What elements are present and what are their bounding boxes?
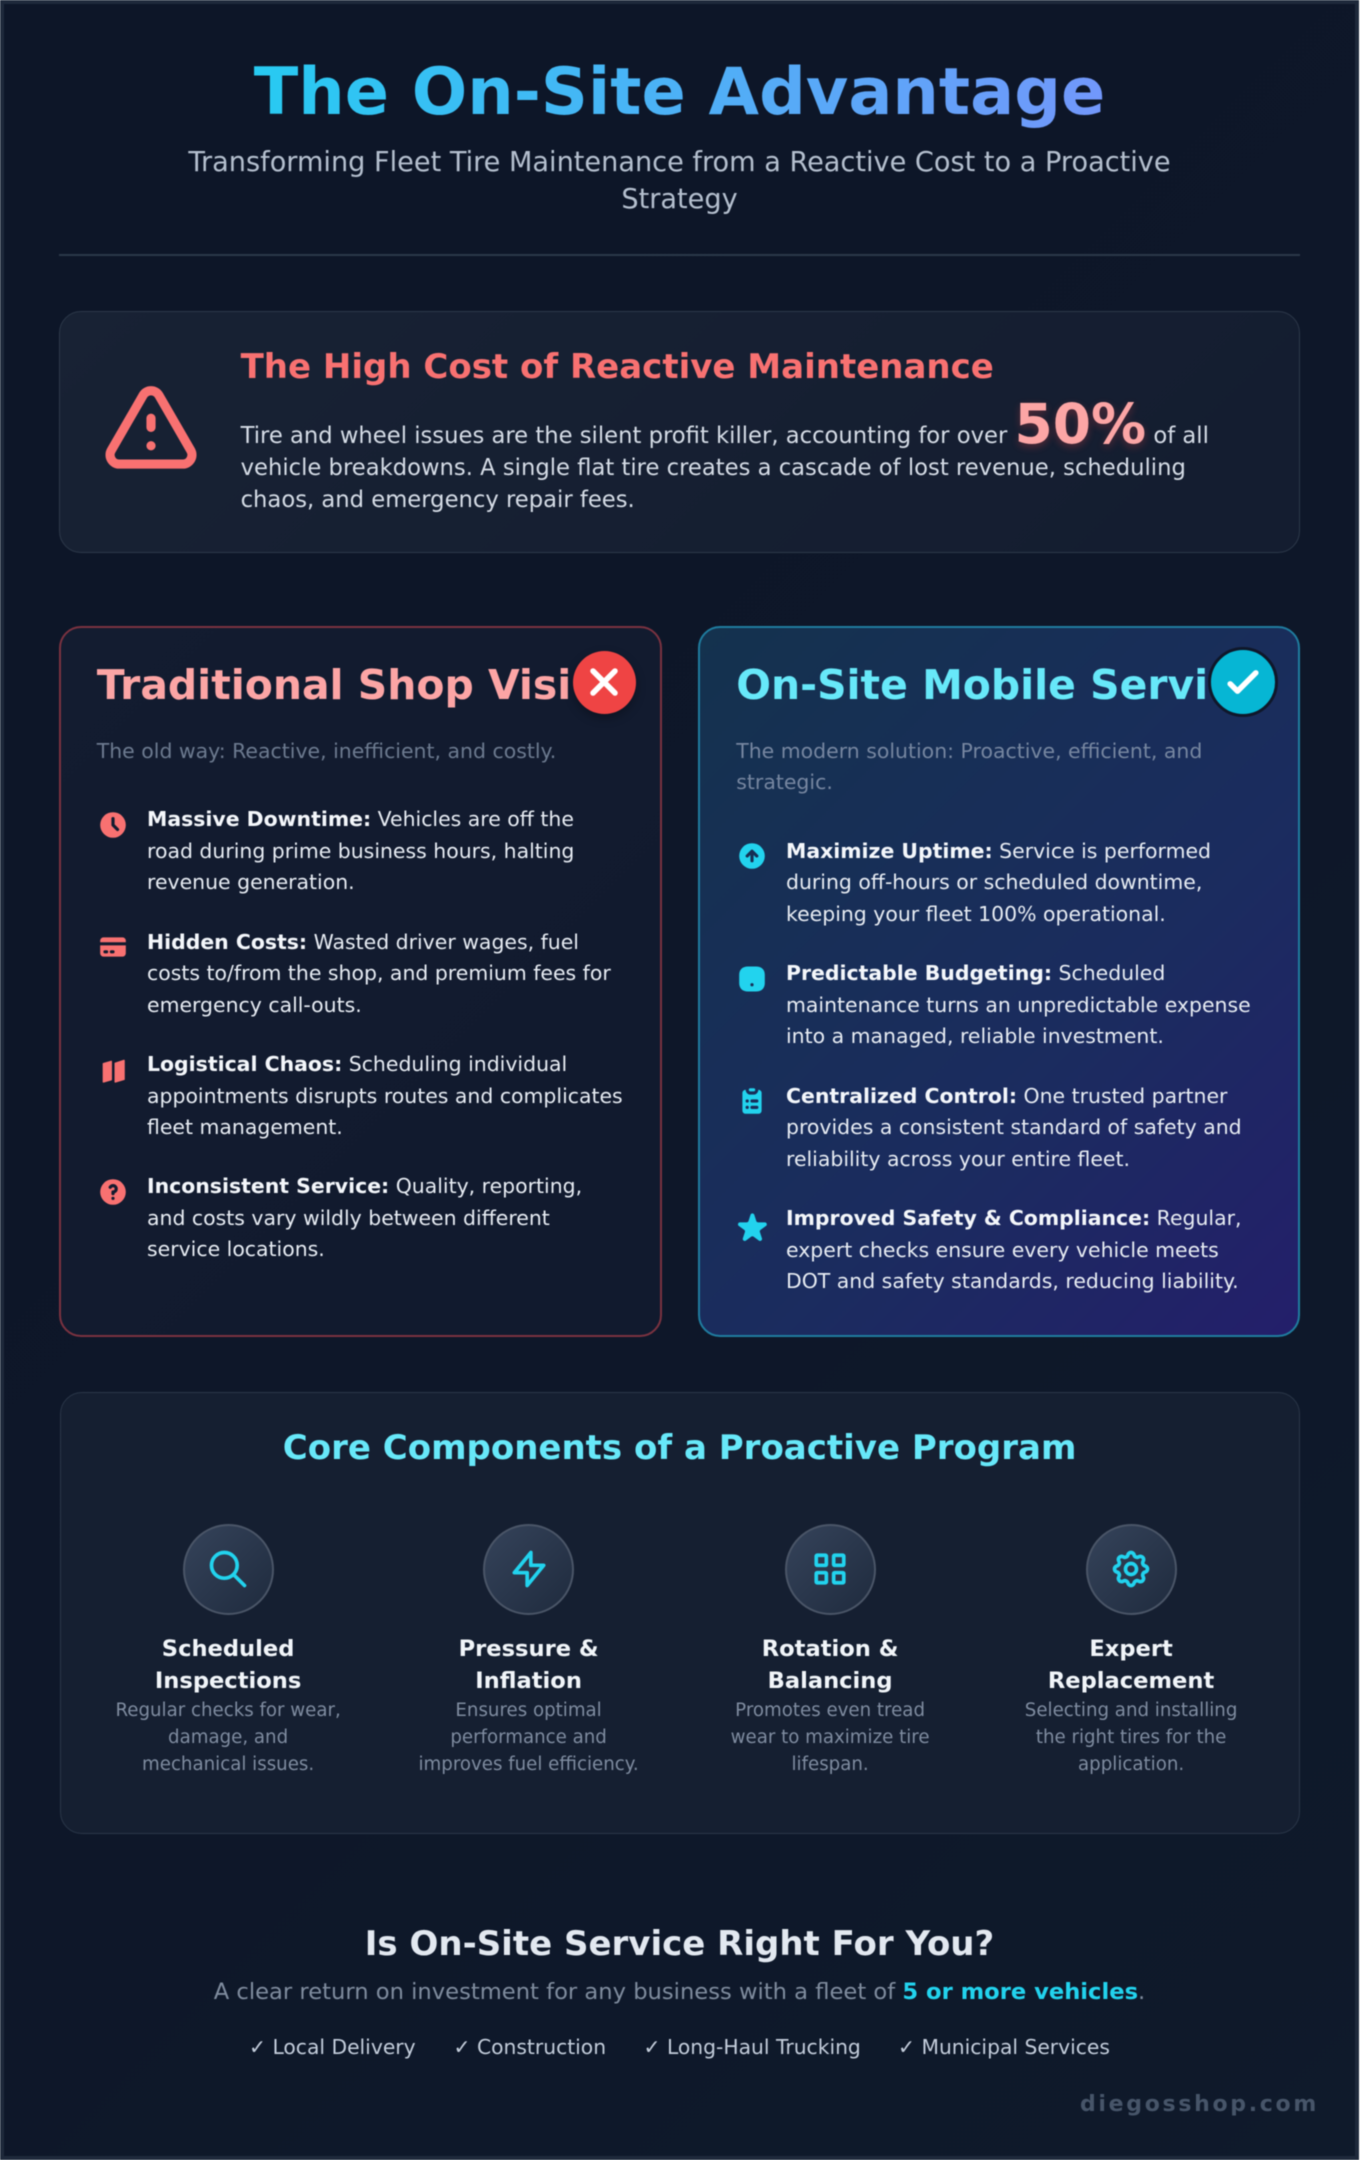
component description: Selecting and installing <box>1025 1700 1237 1721</box>
item: hidden costs <box>147 930 612 1018</box>
component description <box>1025 1700 1237 1775</box>
component title: Rotation & <box>762 1636 898 1662</box>
title: The On-Site Advantage <box>254 54 1105 130</box>
item: maximize uptime: Maximize Uptime: Service is performed <box>786 839 1211 863</box>
fleet type list: ✓ Long-Haul Trucking <box>644 2035 861 2059</box>
icon: clock <box>99 812 127 839</box>
item: logistical chaos <box>146 1052 623 1140</box>
subtitle <box>188 147 1171 215</box>
component description: improves fuel efficiency. <box>418 1754 639 1775</box>
component description: wear to maximize tire <box>731 1727 930 1748</box>
item: improved safety: expert checks ensure every vehicle meets <box>786 1238 1219 1262</box>
on-site subtitle <box>736 738 1202 794</box>
item: predictable budgeting: into a managed, reliable investment. <box>786 1024 1164 1048</box>
on-site subtitle: The modern solution: Proactive, efficient, and <box>736 738 1202 762</box>
item: predictable budgeting <box>786 961 1251 1048</box>
item: logistical chaos: fleet management. <box>147 1115 343 1139</box>
item: predictable budgeting: Predictable Budgeting: Scheduled <box>786 961 1165 985</box>
badge: cyan check <box>1208 647 1278 717</box>
component description: performance and <box>450 1727 607 1748</box>
component description: application. <box>1078 1754 1184 1775</box>
panel: high cost alert <box>59 311 1300 553</box>
component description <box>115 1700 341 1775</box>
component title <box>459 1636 599 1694</box>
component description: Promotes even tread <box>735 1700 925 1721</box>
component title: Scheduled <box>162 1636 294 1662</box>
component description <box>731 1700 930 1775</box>
fleet type list <box>249 2035 1110 2060</box>
alert body text: chaos, and emergency repair fees. <box>241 487 635 513</box>
item: centralized control: Centralized Control: One trusted partner <box>786 1084 1227 1108</box>
on-site subtitle: strategic. <box>736 770 833 794</box>
component description: mechanical issues. <box>142 1754 314 1775</box>
item: massive downtime: revenue generation. <box>147 870 355 894</box>
icon: credit card <box>99 936 127 958</box>
alert body text <box>240 392 1209 513</box>
subtitle: Transforming Fleet Tire Maintenance from a Reactive Cost to a Proactive <box>188 147 1171 178</box>
subtitle: Strategy <box>621 184 738 215</box>
item: predictable budgeting: maintenance turns an unpredictable expense <box>786 993 1251 1017</box>
component: scheduled inspections <box>115 1524 341 1775</box>
item: maximize uptime <box>786 839 1211 926</box>
icon: map <box>102 1059 126 1084</box>
item: improved safety: DOT and safety standards, reducing liability. <box>786 1269 1239 1293</box>
component description: lifespan. <box>792 1754 869 1775</box>
fleet type list: ✓ Construction <box>454 2035 606 2059</box>
traditional subtitle: The old way: Reactive, inefficient, and costly. <box>97 738 556 762</box>
item: massive downtime <box>147 807 574 894</box>
component title: Expert <box>1089 1636 1173 1662</box>
closing text: A clear return on investment for any business with a fleet of 5 or more vehicles. <box>214 1979 1145 2005</box>
item: hidden costs: emergency call-outs. <box>147 993 362 1017</box>
component title: Inspections <box>155 1668 301 1694</box>
fleet type list: ✓ Local Delivery <box>249 2035 416 2059</box>
core components heading: Core Components of a Proactive Program <box>283 1428 1076 1468</box>
component description: Ensures optimal <box>455 1700 602 1721</box>
item: hidden costs: costs to/from the shop, and premium fees for <box>147 961 611 985</box>
item: maximize uptime: keeping your fleet 100% operational. <box>786 902 1166 926</box>
icon: warning triangle <box>104 385 198 470</box>
item: inconsistent service: and costs vary wildly between different <box>147 1206 550 1230</box>
item: centralized control <box>786 1084 1242 1172</box>
icon: search <box>183 1524 274 1615</box>
item: improved safety: Improved Safety & Compliance: Regular, <box>786 1206 1242 1230</box>
item: centralized control: reliability across your entire fleet. <box>786 1147 1130 1171</box>
item: improved safety <box>786 1206 1242 1294</box>
component: expert replacement <box>1025 1524 1237 1775</box>
item: massive downtime: road during prime business hours, halting <box>147 839 574 863</box>
item: massive downtime: Massive Downtime: Vehicles are off the <box>147 807 574 831</box>
component title: Replacement <box>1048 1668 1214 1694</box>
closing heading: Is On-Site Service Right For You? <box>365 1924 994 1964</box>
item: inconsistent service <box>147 1174 582 1261</box>
icon: clipboard <box>742 1088 762 1114</box>
alert heading: The High Cost of Reactive Maintenance <box>241 347 994 387</box>
panel: traditional shop visit <box>59 626 662 1337</box>
component description: the right tires for the <box>1036 1727 1226 1748</box>
item: logistical chaos: Logistical Chaos: Scheduling individual <box>147 1052 567 1076</box>
component: rotation and balancing <box>731 1524 930 1775</box>
icon: star <box>737 1212 768 1242</box>
item: maximize uptime: during off-hours or scheduled downtime, <box>786 870 1202 894</box>
component description <box>418 1700 639 1775</box>
item: logistical chaos: appointments disrupts routes and complicates <box>147 1084 623 1108</box>
badge: red cross <box>573 651 636 714</box>
alert body text: Tire and wheel issues are the silent profit killer, accounting for over 50% of all <box>241 392 1209 456</box>
component title: Balancing <box>768 1668 893 1694</box>
component description: damage, and <box>168 1727 288 1748</box>
component title <box>1048 1636 1215 1694</box>
item: centralized control: provides a consistent standard of safety and <box>786 1115 1242 1139</box>
watermark: diegosshop.com <box>1080 2092 1319 2117</box>
component title: Pressure & <box>459 1636 599 1662</box>
alert body text: vehicle breakdowns. A single flat tire creates a cascade of lost revenue, scheduling <box>241 455 1186 481</box>
component description: Regular checks for wear, <box>115 1700 341 1721</box>
icon: cog <box>1086 1524 1177 1615</box>
component title: Inflation <box>475 1668 582 1694</box>
component title <box>155 1636 301 1694</box>
item: inconsistent service: service locations. <box>147 1237 325 1261</box>
panel: core components <box>60 1392 1300 1834</box>
panel: on-site mobile service <box>698 626 1300 1337</box>
fleet type list: ✓ Municipal Services <box>898 2035 1110 2059</box>
icon: budget token <box>738 966 766 992</box>
component: pressure and inflation <box>418 1524 639 1775</box>
icon: four-square grid <box>785 1524 876 1615</box>
icon: lightning bolt <box>483 1524 574 1615</box>
icon: arrow up circle <box>738 842 766 870</box>
item: inconsistent service: Inconsistent Service: Quality, reporting, <box>147 1174 582 1198</box>
component title <box>762 1636 898 1694</box>
icon: question mark <box>99 1178 127 1206</box>
item: hidden costs: Hidden Costs: Wasted driver wages, fuel <box>147 930 579 954</box>
